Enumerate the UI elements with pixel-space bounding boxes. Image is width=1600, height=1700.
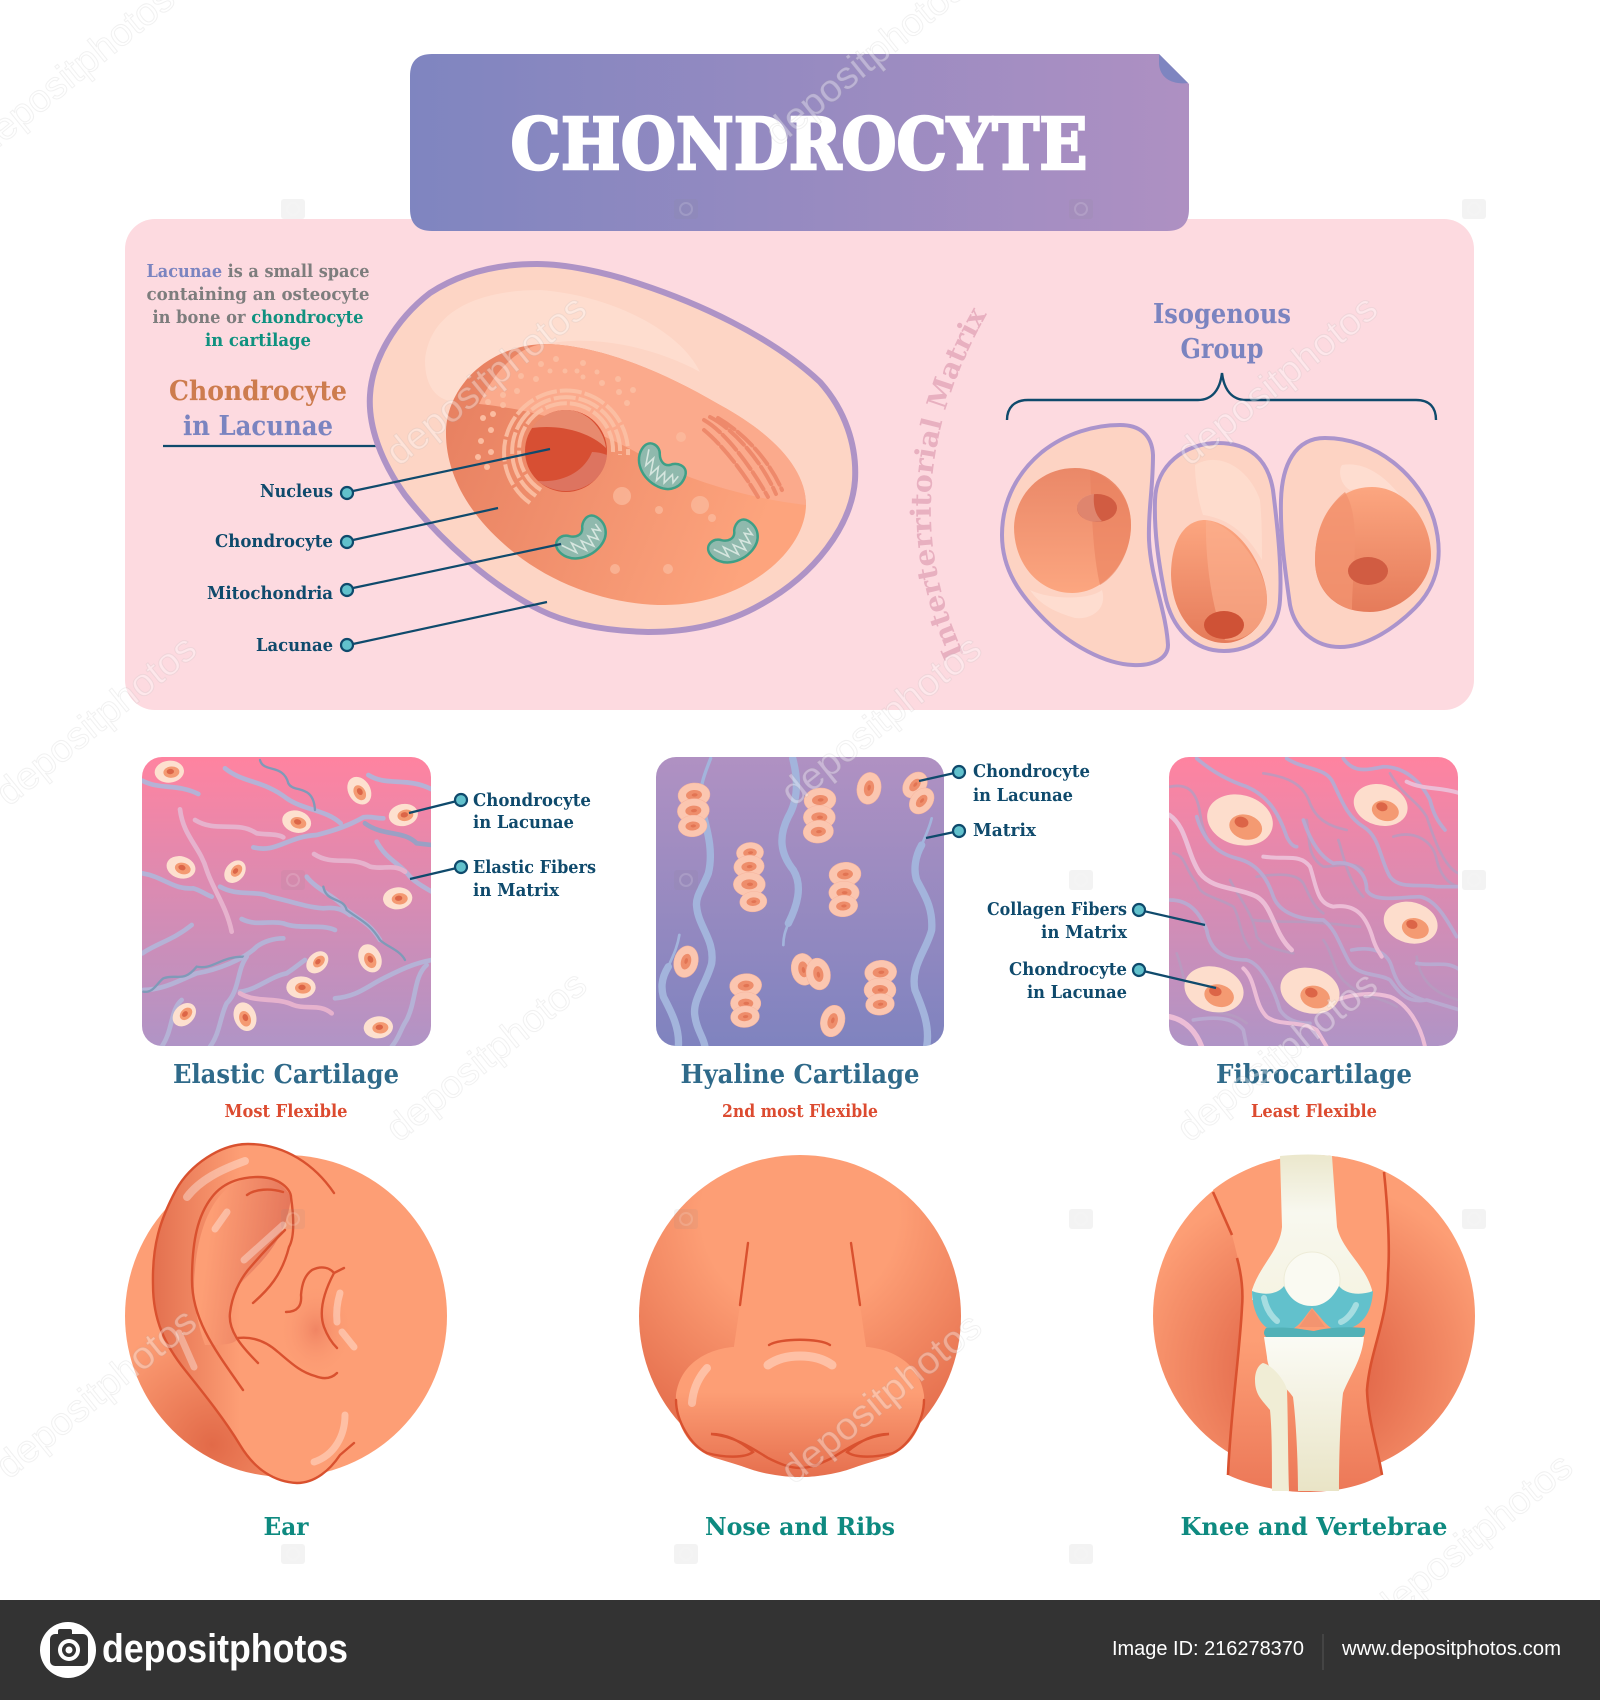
watermarks: depositphotos <box>1169 963 1386 1150</box>
icon: knee <box>1153 1154 1475 1492</box>
footer logo: depositphotos <box>102 1627 348 1671</box>
panel: elastic cartilage <box>142 757 596 1122</box>
watermarks: depositphotos <box>1364 1445 1581 1632</box>
cell 3 <box>1281 438 1439 647</box>
heading: isogenous group: Group <box>1180 334 1264 365</box>
label: knee and vertebrae: Knee and Vertebrae <box>1180 1512 1448 1541</box>
labels: fibrocartilage: in Matrix <box>1041 922 1127 943</box>
website: www.depositphotos.com <box>1341 1638 1561 1660</box>
lacunae description: in bone or chondrocyte <box>152 307 364 328</box>
watermarks: depositphotos <box>378 287 595 474</box>
golgi <box>704 417 782 497</box>
labels: fibrocartilage: in Lacunae <box>1027 982 1127 1003</box>
patella <box>1284 1252 1340 1308</box>
footer logo <box>40 1622 348 1678</box>
panel: chondrocyte in lacunae <box>125 219 1474 710</box>
tissue square: fibrocartilage <box>1169 757 1460 1047</box>
panel: fibrocartilage <box>987 757 1460 1122</box>
cell 1 <box>1002 425 1168 665</box>
labels: hyaline <box>919 761 1090 841</box>
elastic cells <box>154 759 420 1040</box>
lacunae description: in cartilage <box>205 330 311 351</box>
watermarks: depositphotos <box>773 1305 990 1492</box>
labels: fibrocartilage <box>987 899 1216 1003</box>
labels: elastic <box>409 790 596 901</box>
image id: Image ID: 216278370 <box>1112 1638 1304 1660</box>
banner fold <box>1159 54 1188 83</box>
lacuna outline <box>370 264 855 632</box>
watermarks: depositphotos <box>773 627 990 814</box>
mitochondria <box>552 440 765 574</box>
labels: elastic: Elastic Fibers <box>473 857 596 878</box>
hyaline cells <box>670 767 939 1040</box>
labels: hyaline: Matrix <box>973 820 1036 841</box>
subheading: 2nd most flexible: 2nd most Flexible <box>722 1101 878 1122</box>
icon: ear <box>125 1144 447 1483</box>
labels: lacuna diagram: Chondrocyte <box>215 531 333 552</box>
chondrocyte light area <box>479 344 806 505</box>
lacunae description <box>146 261 370 351</box>
meniscus bar <box>1264 1327 1365 1337</box>
tibia <box>1264 1337 1364 1491</box>
fibrocartilage cells <box>1179 778 1442 1020</box>
heading: fibrocartilage: Fibrocartilage <box>1216 1060 1412 1090</box>
endoplasmic reticulum <box>504 391 628 503</box>
chondrocyte body <box>446 344 806 605</box>
labels: elastic: in Matrix <box>473 880 559 901</box>
tissue square: hyaline <box>656 757 944 1047</box>
labels: lacuna diagram: Nucleus <box>260 481 333 502</box>
labels: elastic: Chondrocyte <box>473 790 591 811</box>
collagen fibers <box>1169 758 1460 1047</box>
heading: elastic cartilage: Elastic Cartilage <box>173 1060 399 1090</box>
heading: chondrocyte in lacunae: in Lacunae <box>183 411 333 442</box>
heading: isogenous group: Isogenous <box>1153 299 1291 330</box>
lacunae description: Lacunae is a small space <box>146 261 370 282</box>
title text: CHONDROCYTE <box>510 102 1088 186</box>
icon: nose <box>639 1155 961 1477</box>
femur <box>1252 1154 1372 1300</box>
lacunae description: containing an osteocyte <box>146 284 370 305</box>
footer bar <box>0 1600 1600 1700</box>
heading: chondrocyte in lacunae <box>163 376 376 446</box>
curved label: interterritorial matrix: Interterritorial Matrix <box>910 308 987 661</box>
heading: hyaline cartilage: Hyaline Cartilage <box>680 1060 920 1090</box>
elastic fibers <box>142 760 432 1047</box>
banner shape <box>410 54 1189 231</box>
cartilage <box>1252 1286 1373 1332</box>
label: ear: Ear <box>264 1512 309 1541</box>
labels: fibrocartilage: Collagen Fibers <box>987 899 1127 920</box>
panel background <box>125 219 1474 710</box>
watermarks: depositphotos <box>378 963 595 1150</box>
heading: isogenous group <box>1153 299 1291 365</box>
labels: lacuna diagram <box>207 449 561 656</box>
cell 2 <box>1155 443 1281 651</box>
leg <box>1213 1155 1389 1492</box>
diagram: lacuna cell <box>370 264 855 632</box>
heading: chondrocyte in lacunae: Chondrocyte <box>169 376 347 407</box>
label: nose and ribs: Nose and Ribs <box>705 1512 895 1541</box>
watermarks: depositphotos <box>1169 287 1386 474</box>
tissue square: elastic <box>142 757 432 1047</box>
labels: hyaline: Chondrocyte <box>973 761 1090 782</box>
labels: elastic: in Lacunae <box>473 812 574 833</box>
subheading: most flexible: Most Flexible <box>224 1101 348 1122</box>
labels: lacuna diagram: Lacunae <box>256 635 333 656</box>
vesicles <box>475 356 716 574</box>
panel: hyaline cartilage <box>656 757 1090 1122</box>
subheading: least flexible: Least Flexible <box>1251 1101 1377 1122</box>
title banner <box>410 54 1189 231</box>
brace <box>1007 373 1436 420</box>
hyaline matrix strands <box>662 758 932 1047</box>
labels: fibrocartilage: Chondrocyte <box>1009 959 1127 980</box>
labels: lacuna diagram: Mitochondria <box>207 583 333 604</box>
labels: hyaline: in Lacunae <box>973 785 1073 806</box>
nucleus <box>525 410 607 492</box>
lacuna highlight <box>425 290 700 402</box>
diagram: isogenous cells <box>1002 425 1439 665</box>
fibula <box>1255 1363 1289 1491</box>
